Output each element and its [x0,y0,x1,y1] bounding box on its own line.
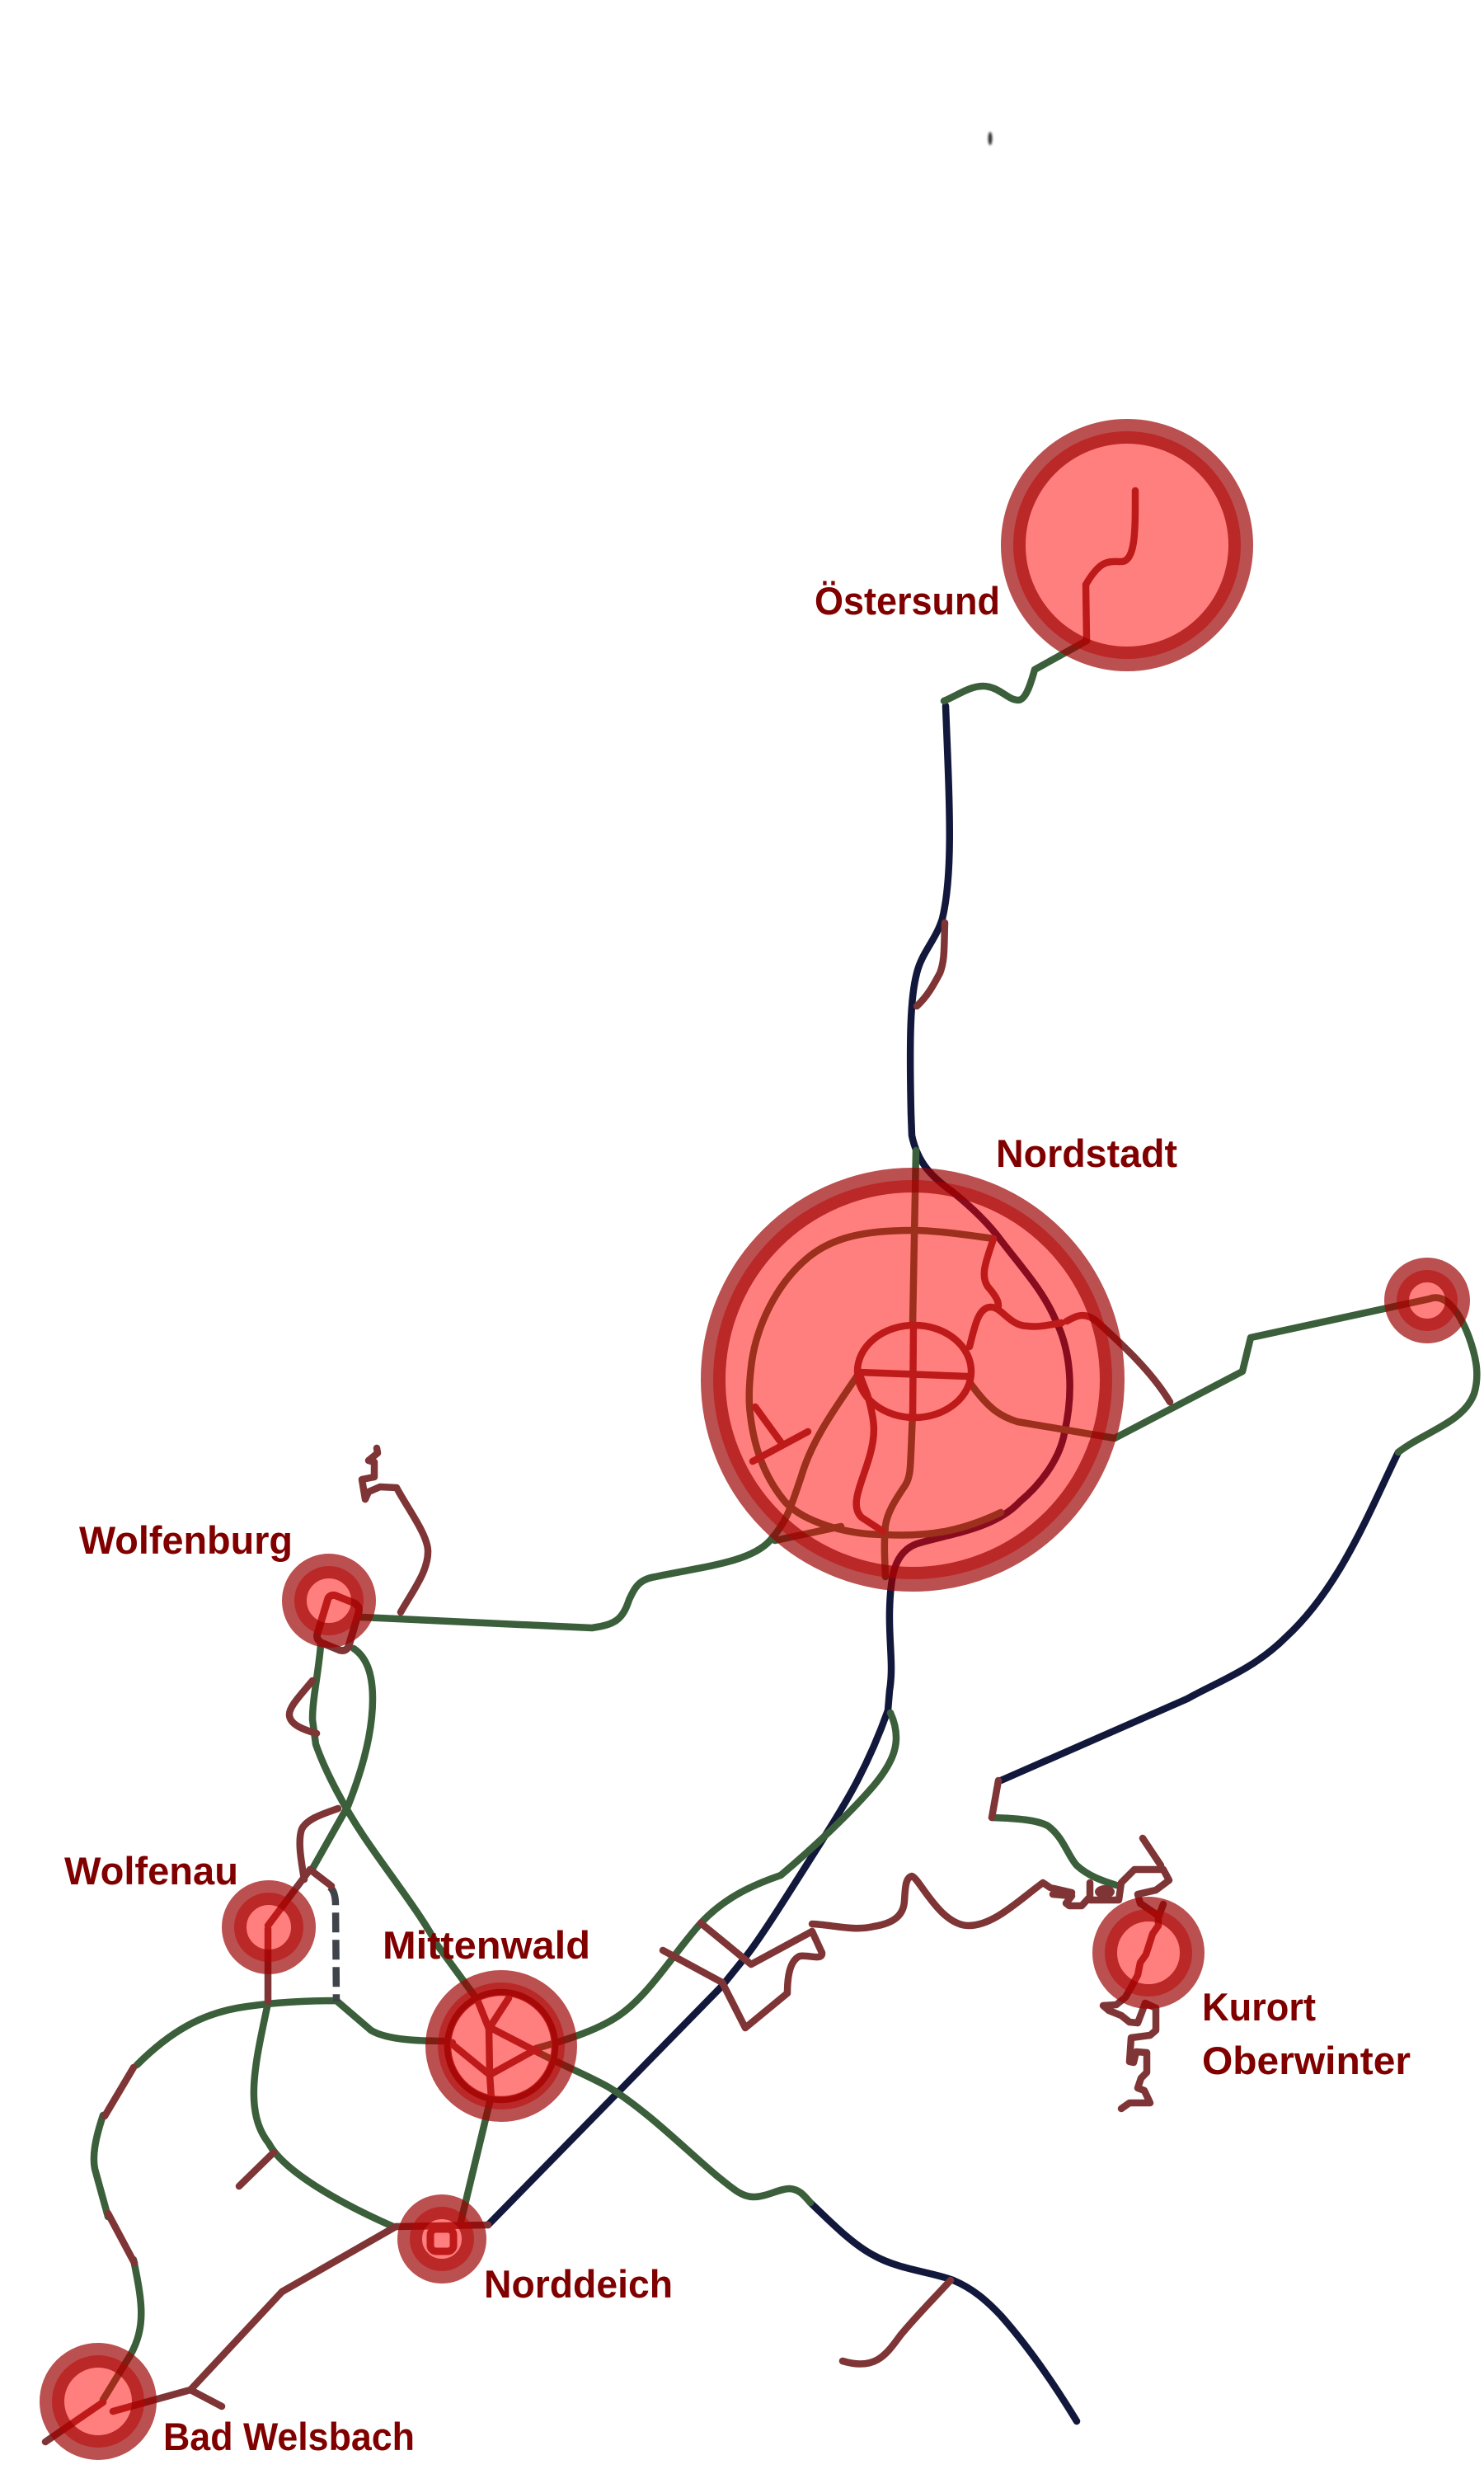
circle Norddeich [410,2207,474,2271]
label Nordstadt: Nordstadt [996,1131,1177,1175]
circle Kurort Oberwinter [1105,1909,1192,1997]
maroon squiggle to Kurort [812,1870,1169,1928]
green line Oestersund [944,641,1087,701]
green line Mittenwald north-east [536,1713,896,2048]
maroon lines Wolfenau [268,1870,331,2001]
green line to Kurort [992,1818,1116,1885]
green line Nordstadt north [913,1150,916,1325]
green line Wolfenburg to Wolfenau [312,1649,373,1869]
label Bad Welsbach: Bad Welsbach [163,2415,415,2458]
label Kurort: Kurort [1202,1985,1316,2029]
maroon connector east [701,1923,812,1964]
green line Norddeich to Mittenwald [461,2102,490,2222]
maroon square Wolfenburg [317,1595,359,1650]
green stub Nordstadt [775,1526,841,1540]
green ring Nordstadt [749,1230,1001,1536]
green line Wolfenau to Norddeich [254,2003,393,2227]
maroon link to navy [992,1780,998,1818]
circle Wolfenburg [294,1566,364,1635]
maroon branch Oestersund [1086,491,1135,641]
maroon lines Bad Welsbach [45,2227,396,2442]
maroon stub Mittenwald [446,2041,453,2043]
green line west two [103,2260,141,2400]
maroon spur west [239,2152,274,2186]
maroon ring Mittenwald [448,1992,555,2100]
maroon branch north of Wolfenburg [362,1448,428,1612]
green line Nordstadt south [885,1412,913,1577]
cross in ellipse [859,1325,967,1417]
maroon star Mittenwald [449,1998,538,2099]
maroon segment west one [105,2067,134,2116]
dashed connector [330,1887,336,2001]
maroon lines Norddeich [396,2225,488,2227]
green line to Wolfenburg [361,1373,859,1628]
circle Wolfenau [234,1893,303,1962]
maroon spur north [917,923,945,1006]
circle Oestersund [1013,431,1241,659]
maroon south spur [843,2280,951,2364]
maroon dot [1095,1885,1115,1898]
navy south line [810,2203,1077,2421]
green line west arc [137,2001,446,2065]
circle east [1397,1270,1458,1331]
green line Wolfenburg to Mittenwald [312,1645,477,2000]
circle Bad Welsbach [52,2355,144,2448]
maroon stub north of Kurort [1143,1838,1161,1865]
maroon segment west two [108,2213,134,2263]
green line Mittenwald south-east [538,2053,810,2203]
label Wolfenau: Wolfenau [64,1849,238,1893]
label Oberwinter: Oberwinter [1202,2039,1411,2082]
label Mittenwald: Mittenwald [383,1923,590,1967]
label Wolfenburg: Wolfenburg [79,1518,293,1562]
maroon branches Nordstadt [753,1239,1170,1531]
circle Nordstadt [713,1180,1112,1579]
maroon jagged line Kurort [1103,1904,1163,2109]
navy east line [1001,1452,1398,1780]
inner ellipse Nordstadt [857,1325,971,1418]
label Norddeich: Norddeich [484,2262,673,2306]
maroon square Norddeich [430,2229,453,2251]
maroon zigzag [663,1931,822,2028]
speck mark [988,132,993,145]
city circles [52,431,1458,2448]
green line east loop [970,1298,1477,1452]
label Oestersund: Östersund [815,579,1000,623]
circle Mittenwald [438,1982,565,2109]
navy main line [488,706,1070,2225]
network lines [45,491,1477,2442]
green line west one [94,2115,108,2217]
maroon curve near Wolfenau [300,1808,338,1879]
maroon small loop [289,1681,317,1733]
